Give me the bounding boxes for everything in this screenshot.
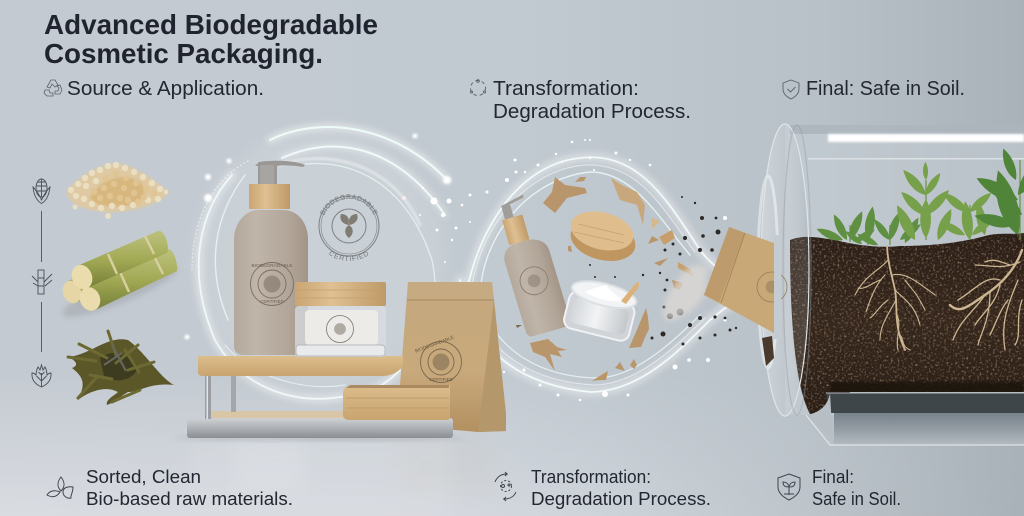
pump bottle: BIODEGRADABLE <box>251 263 293 269</box>
dark soil flecks <box>589 196 737 346</box>
connector: cane to seaweed <box>40 302 42 352</box>
kraft bag <box>400 282 506 432</box>
energy rings: left <box>184 127 451 399</box>
wooden block <box>343 385 450 420</box>
cream jar <box>295 282 386 357</box>
heading: source and application: Source & Application. <box>67 78 264 100</box>
heading: transformation: Degradation Process. <box>493 101 691 123</box>
tube rim <box>761 124 811 416</box>
icon: sugarcane <box>32 270 52 294</box>
caption: safe in soil: Final: <box>812 467 854 487</box>
title: Cosmetic Packaging. <box>44 38 323 69</box>
tray <box>806 393 1024 445</box>
kraft bag: BIODEGRADABLE <box>414 335 455 354</box>
caption: raw materials: Sorted, Clean <box>86 467 201 487</box>
heading: transformation: Transformation: <box>493 78 639 100</box>
title: Advanced Biodegradable <box>44 9 378 40</box>
bottle badge <box>250 262 294 306</box>
certification badge: BIODEGRADABLE <box>320 194 378 215</box>
icon: recycle <box>44 80 62 96</box>
certification badge: CERTIFIED <box>330 251 368 261</box>
product display <box>187 161 506 438</box>
soil spill at opening <box>762 336 774 366</box>
material: sugarcane <box>58 231 182 325</box>
caption: degradation: Degradation Process. <box>531 489 711 509</box>
caption: safe in soil <box>778 467 901 509</box>
caption: degradation: Transformation: <box>531 467 651 487</box>
steel base <box>187 411 453 438</box>
caption: raw materials: Bio-based raw materials. <box>86 489 293 509</box>
tube rear opening <box>758 176 778 368</box>
dust cloud <box>664 265 708 320</box>
material: seaweed <box>68 331 174 405</box>
title <box>44 9 378 69</box>
steel legs <box>205 376 236 419</box>
tube top highlight <box>790 125 1024 160</box>
small bottle <box>488 192 572 338</box>
front cane <box>76 249 177 314</box>
glass tube <box>758 124 1024 445</box>
falling kraft bag <box>704 227 787 366</box>
icon: shield with sprout <box>778 474 800 500</box>
caption: degradation <box>495 467 711 509</box>
connector: corn to cane <box>40 211 42 262</box>
caption: raw materials <box>47 467 293 509</box>
plants <box>815 147 1024 248</box>
kraft bag: CERTIFIED <box>429 377 454 382</box>
soil <box>785 225 1024 420</box>
pump bottle <box>234 161 308 355</box>
back cane <box>60 272 96 306</box>
jar badge <box>326 316 354 342</box>
caption: safe in soil: Safe in Soil. <box>812 489 901 509</box>
icon: degrade cycle <box>495 472 516 501</box>
heading: transformation <box>470 78 691 123</box>
spatula <box>621 283 639 304</box>
energy swirls: centre <box>460 157 745 392</box>
small jar <box>562 276 640 343</box>
tube body <box>785 125 1024 415</box>
material: pellets <box>66 162 169 219</box>
heading: final: Final: Safe in Soil. <box>806 78 965 100</box>
badge on bag <box>420 342 462 382</box>
certification badge <box>318 194 380 261</box>
icon: corn <box>33 179 50 204</box>
icon: seaweed <box>32 365 51 387</box>
top cane <box>68 231 168 292</box>
wood shards <box>516 177 694 381</box>
icon: shield check <box>783 80 799 99</box>
roots <box>855 246 1022 350</box>
icon: dotted cycle <box>470 80 486 96</box>
wooden shelf <box>198 356 403 376</box>
sparkle particles <box>402 139 727 401</box>
degrading objects <box>488 177 737 381</box>
wooden lid <box>566 205 640 267</box>
icon: leaves <box>47 477 73 498</box>
floor reflection <box>234 440 490 495</box>
pump bottle: CERTIFIED <box>260 299 285 304</box>
tilted bag badge <box>757 272 787 302</box>
